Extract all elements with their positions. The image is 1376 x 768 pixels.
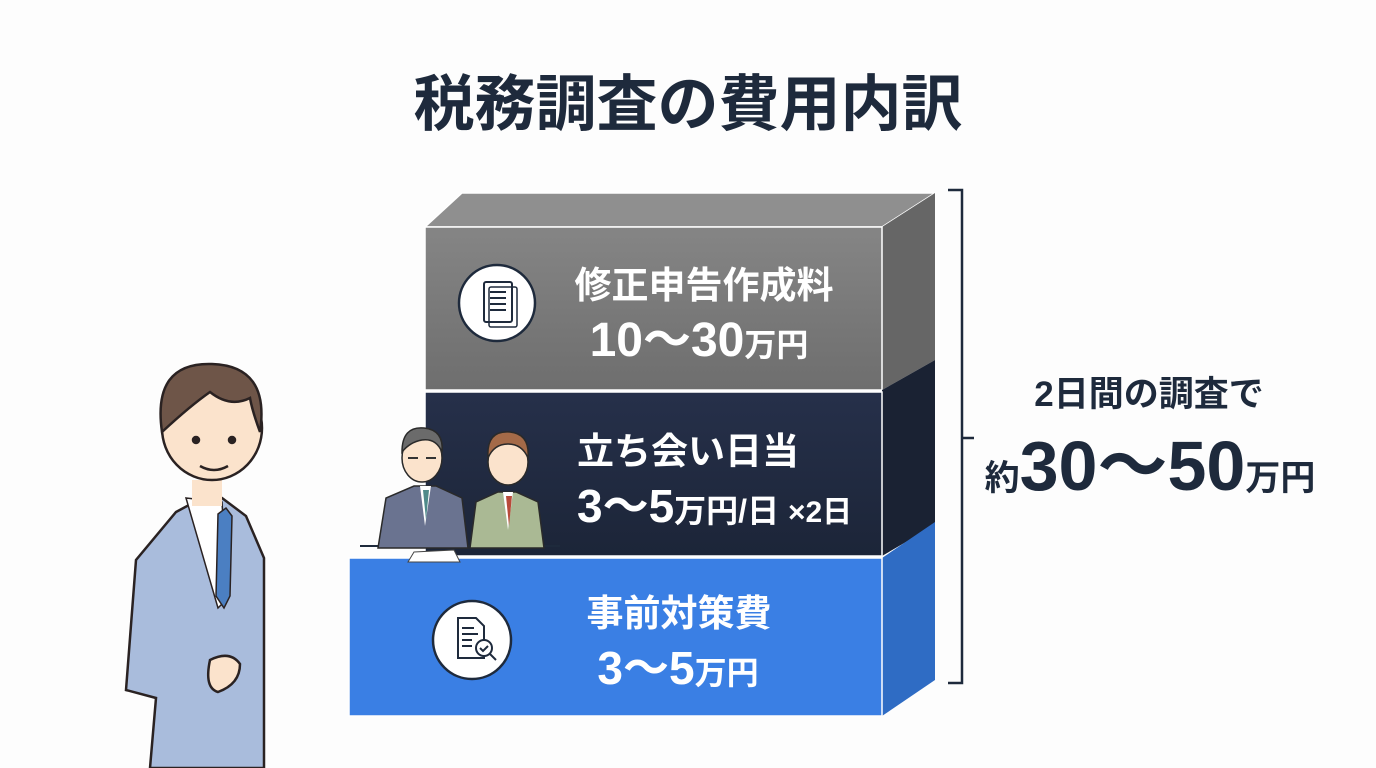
text: top label: 修正申告作成料 — [574, 265, 834, 306]
illustration: two advisors at desk — [360, 428, 560, 562]
text: bottom label: 事前対策費 — [586, 593, 772, 634]
block: top (correction filing fee) — [425, 193, 935, 390]
total callout — [985, 375, 1315, 505]
icon: document with magnifier — [433, 601, 511, 679]
title: 税務調査の費用内訳 — [413, 70, 963, 138]
block: middle (attendance fee) — [425, 360, 935, 556]
block: top (correction filing fee): 10〜30万円 — [590, 314, 808, 367]
block: bottom (prep cost): 3〜5万円 — [597, 642, 759, 694]
block: middle (attendance fee): 3〜5万円/日 ×2日 — [577, 480, 852, 532]
total callout: 約30〜50万円 — [985, 427, 1315, 505]
total callout: 2日間の調査で — [1034, 375, 1264, 414]
block: bottom (prep cost) — [349, 522, 935, 716]
illustration: businessman — [126, 364, 264, 768]
text: middle label: 立ち会い日当 — [577, 431, 799, 472]
icon: document — [459, 265, 535, 341]
bracket — [948, 190, 974, 683]
